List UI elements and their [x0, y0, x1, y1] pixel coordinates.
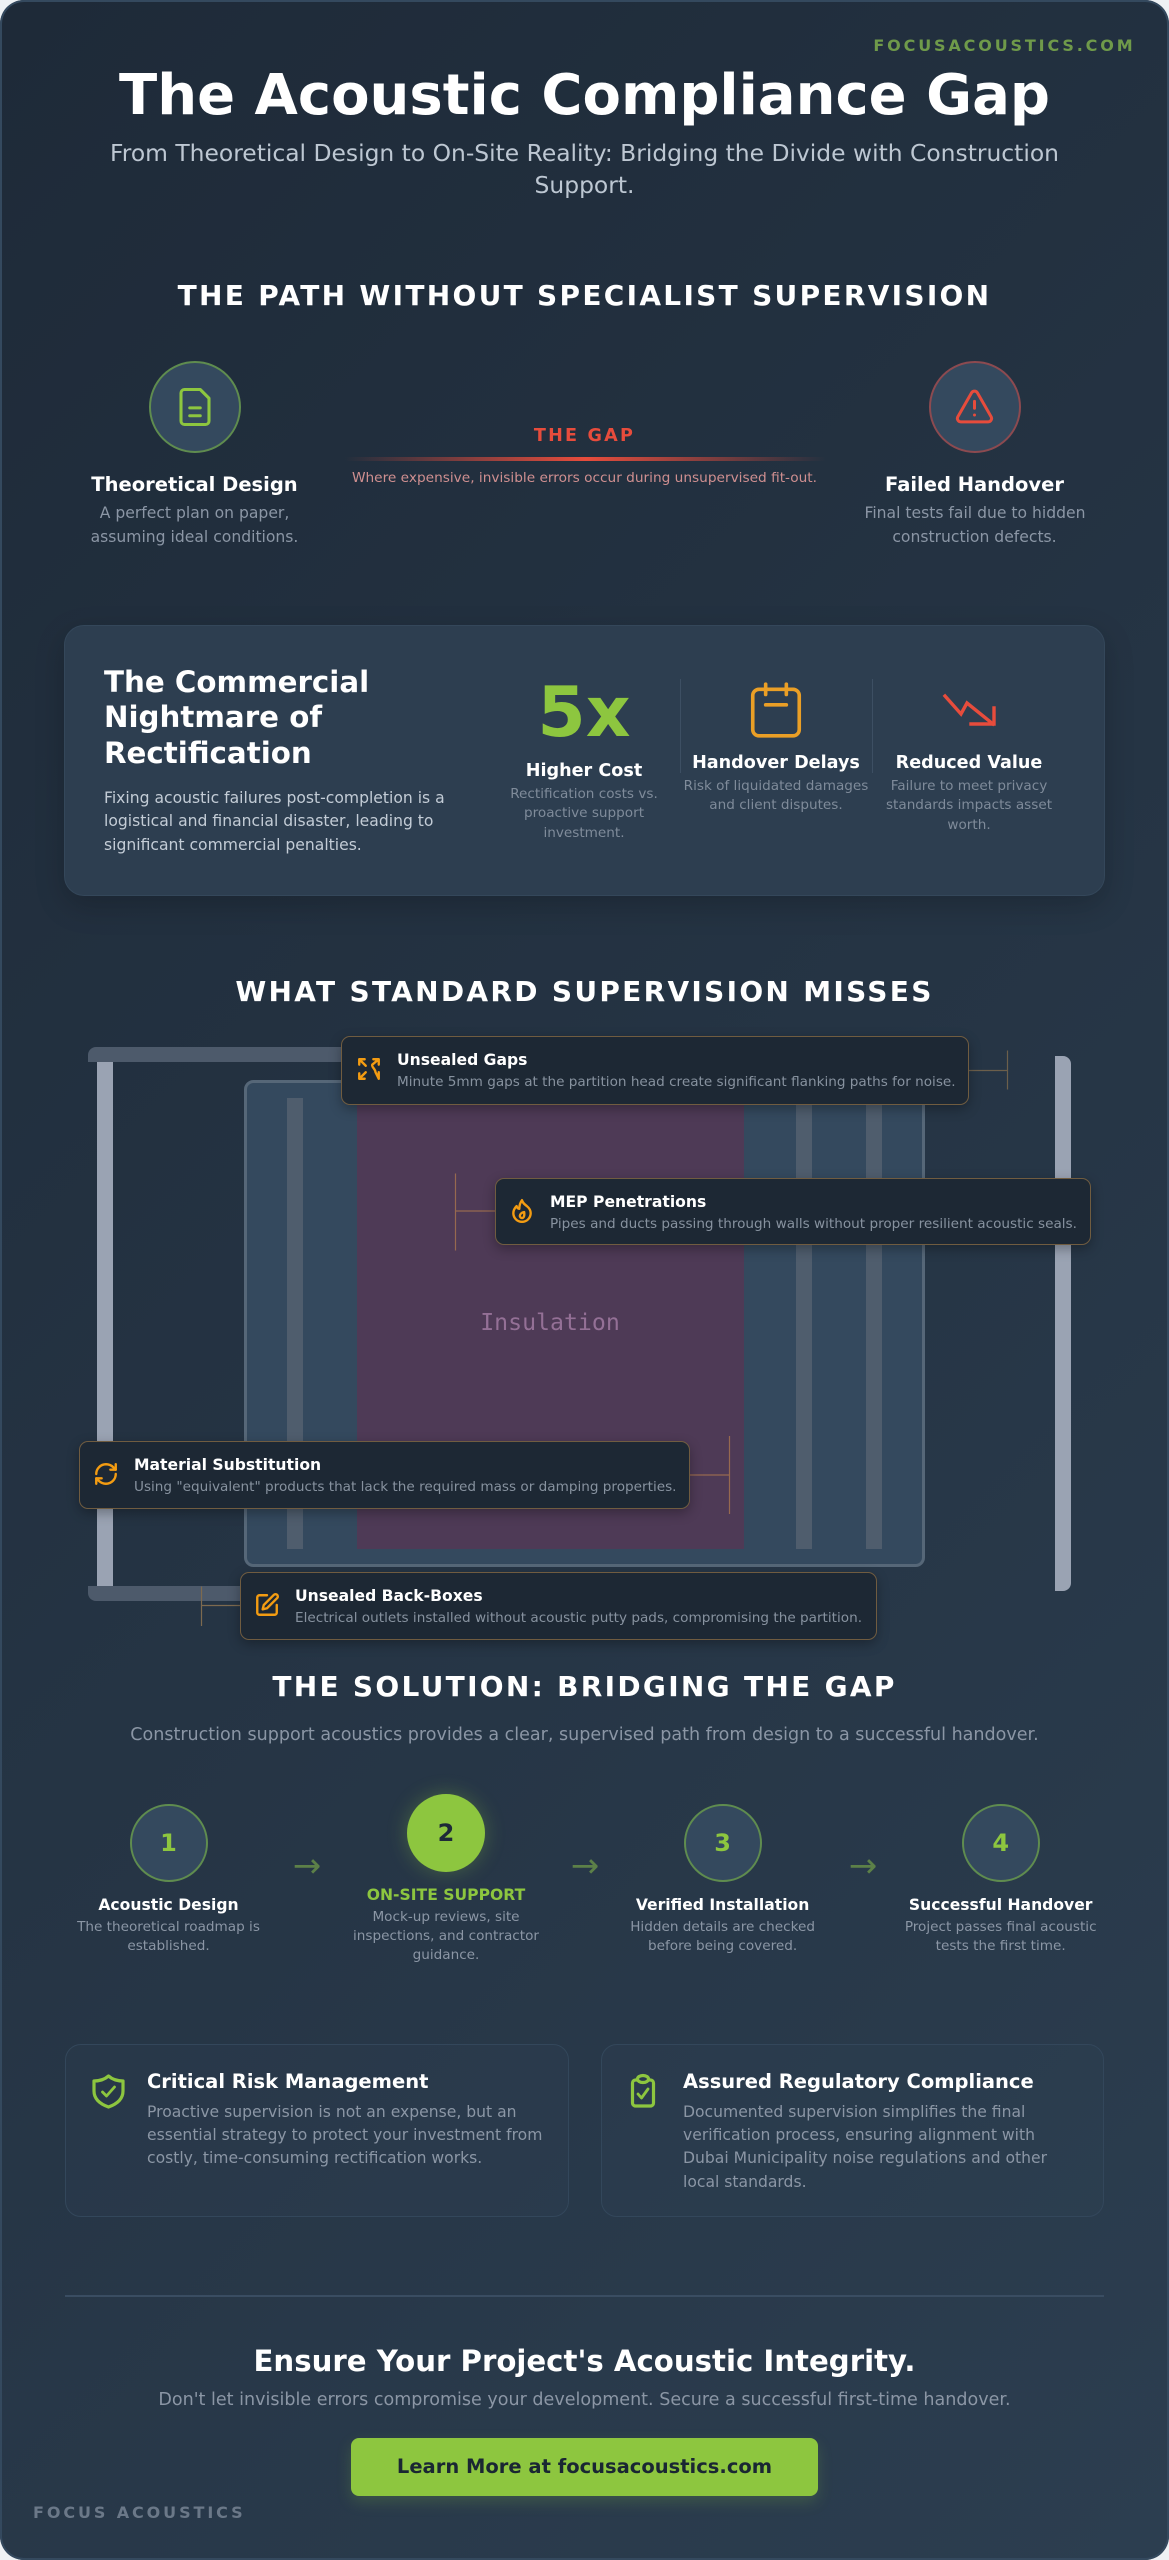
stud 3: [866, 1098, 882, 1549]
heading: path without supervision: THE PATH WITHOUT SPECIALIST SUPERVISION: [178, 278, 991, 312]
subtitle: From Theoretical Design to On-Site Reality: Bridging the Divide with Construction: [110, 139, 1059, 167]
callout title: Unsealed Gaps: [397, 1050, 527, 1068]
panel description: Fixing acoustic failures post-completion is a: [104, 788, 445, 806]
connector: back-boxes: [202, 1586, 240, 1626]
step description: guidance.: [413, 1947, 479, 1963]
node description: construction defects.: [892, 528, 1057, 546]
panel description: significant commercial penalties.: [104, 836, 362, 854]
card text: [147, 2102, 542, 2167]
icon: refresh: [95, 1463, 117, 1485]
diagram: wall section: [88, 1047, 1071, 1626]
callout: unsealed back-boxes: [240, 1572, 877, 1640]
footer brand: FOCUS ACOUSTICS: [33, 2503, 246, 2522]
step title: Acoustic Design: [98, 1896, 239, 1914]
left board: [97, 1062, 113, 1586]
stat title: Handover Delays: [692, 753, 860, 773]
connector: MEP: [456, 1174, 495, 1250]
cavity box: [246, 1082, 924, 1566]
card text: verification process, ensuring alignment with: [683, 2126, 1035, 2144]
node description: A perfect plan on paper,: [100, 504, 289, 522]
step 3: [630, 1804, 815, 1954]
stat: higher cost: [510, 672, 658, 840]
panel heading: Rectification: [104, 736, 312, 770]
big number: 5x: [537, 672, 631, 753]
stat description: Risk of liquidated damages: [684, 778, 868, 794]
step 4: [905, 1804, 1097, 1954]
stat: reduced value: [886, 694, 1052, 832]
card text: Documented supervision simplifies the final: [683, 2102, 1025, 2120]
solution intro: Construction support acoustics provides a clear, supervised path from design to a successful handover.: [130, 1724, 1039, 1744]
callout description: Pipes and ducts passing through walls without proper resilient acoustic seals.: [550, 1216, 1077, 1232]
step 2 highlighted: [353, 1787, 539, 1963]
panel description: logistical and financial disaster, leading to: [104, 812, 433, 830]
icon: warning: [928, 361, 1020, 453]
gap label: THE GAP: [534, 426, 635, 446]
step description: Project passes final acoustic: [905, 1918, 1097, 1934]
CTA button: Learn More at focusacoustics.com: [397, 2454, 772, 2478]
step number: [407, 1794, 485, 1872]
insulation label: Insulation: [480, 1309, 620, 1336]
CTA button: [351, 2438, 818, 2496]
step description: [630, 1918, 815, 1954]
callout description: Minute 5mm gaps at the partition head create significant flanking paths for noise.: [397, 1074, 956, 1090]
arrow 1: →: [293, 1846, 321, 1886]
top track: [88, 1047, 720, 1062]
step description: before being covered.: [648, 1938, 797, 1954]
icon: trending down: [942, 694, 996, 726]
callout: MEP penetrations: [495, 1178, 1091, 1245]
node description: Final tests fail due to hidden: [864, 504, 1086, 522]
bottom track: [88, 1586, 720, 1601]
step description: Mock-up reviews, site: [372, 1908, 520, 1924]
step description: The theoretical roadmap is: [77, 1918, 260, 1934]
stud 2: [796, 1098, 812, 1549]
step description: established.: [127, 1938, 210, 1954]
step number: [962, 1804, 1040, 1882]
stat description: [886, 778, 1052, 832]
step number: 3: [714, 1829, 731, 1857]
panel description: [104, 788, 445, 854]
arrow 2: →: [571, 1846, 599, 1886]
stat description: and client disputes.: [709, 797, 843, 813]
step description: [353, 1908, 539, 1963]
heading: the solution: THE SOLUTION: BRIDGING THE GAP: [272, 1670, 897, 1703]
callout: material substitution: [79, 1441, 690, 1508]
insulation: [357, 1098, 744, 1549]
CTA heading: Ensure Your Project's Acoustic Integrity.: [253, 2344, 916, 2378]
title: The Acoustic Compliance Gap: [119, 62, 1050, 128]
stat description: Rectification costs vs.: [510, 786, 658, 802]
step description: tests the first time.: [936, 1938, 1066, 1954]
stat description: worth.: [947, 816, 991, 832]
icon: flame: [512, 1198, 532, 1223]
card text: Dubai Municipality noise regulations and other: [683, 2149, 1047, 2167]
step title: ON-SITE SUPPORT: [367, 1886, 525, 1904]
node description: [91, 504, 298, 546]
panel heading: The Commercial: [104, 664, 369, 698]
connector: gaps: [969, 1050, 1008, 1090]
heading: what standard supervision misses: WHAT STANDARD SUPERVISION MISSES: [235, 974, 934, 1008]
card title: Assured Regulatory Compliance: [683, 2070, 1034, 2093]
card title: Critical Risk Management: [147, 2070, 428, 2093]
icon: clipboard: [630, 2074, 656, 2108]
callout title: MEP Penetrations: [550, 1192, 706, 1210]
node title: Theoretical Design: [91, 472, 298, 496]
card text: costly, time-consuming rectification works.: [147, 2149, 482, 2167]
card text: essential strategy to protect your investment from: [147, 2126, 542, 2144]
step title: Successful Handover: [909, 1896, 1092, 1914]
step description: inspections, and contractor: [353, 1928, 539, 1944]
callout title: Material Substitution: [134, 1456, 321, 1474]
subtitle: [110, 139, 1059, 198]
stat description: [684, 778, 868, 813]
arrow 3: →: [849, 1846, 877, 1886]
stud 1: [287, 1098, 303, 1549]
card: critical risk management: [65, 2044, 569, 2217]
stat description: Failure to meet privacy: [891, 778, 1047, 794]
callout description: Using "equivalent" products that lack the required mass or damping properties.: [134, 1478, 676, 1494]
stat title: Reduced Value: [896, 753, 1042, 773]
card: assured regulatory compliance: [601, 2044, 1104, 2217]
node description: [864, 504, 1086, 546]
step number: 1: [160, 1829, 177, 1857]
icon: gaps arrows: [358, 1058, 380, 1080]
right board: [1055, 1056, 1071, 1591]
node description: assuming ideal conditions.: [91, 528, 298, 546]
step number: [684, 1804, 762, 1882]
node: failed handover: [864, 361, 1086, 546]
card text: local standards.: [683, 2173, 807, 2191]
step number: 2: [438, 1819, 454, 1847]
callout description: Electrical outlets installed without acoustic putty pads, compromising the partition.: [295, 1610, 862, 1626]
node: theoretical design: [91, 361, 298, 546]
stat: handover delays: [684, 682, 868, 813]
icon: edit: [256, 1593, 279, 1616]
subtitle: Support.: [535, 170, 634, 198]
gap line: [345, 457, 826, 461]
callout: unsealed gaps: [341, 1036, 969, 1104]
card text: [683, 2102, 1047, 2191]
gap description: Where expensive, invisible errors occur during unsupervised fit-out.: [352, 470, 817, 486]
stat title: Higher Cost: [526, 760, 642, 780]
stat description: standards impacts asset: [886, 797, 1052, 813]
step description: [905, 1918, 1097, 1954]
stat description: investment.: [543, 824, 625, 840]
icon: calendar: [750, 682, 802, 738]
stat description: proactive support: [524, 805, 644, 821]
step description: Hidden details are checked: [630, 1918, 815, 1934]
connector: substitution: [690, 1436, 730, 1514]
step 1: [77, 1804, 260, 1954]
step description: [77, 1918, 260, 1954]
gap bridge: [352, 426, 817, 486]
icon: document: [148, 361, 240, 453]
stat description: [510, 786, 658, 840]
callout title: Unsealed Back-Boxes: [295, 1586, 483, 1604]
panel heading: Nightmare of: [104, 700, 322, 734]
step number: [130, 1804, 208, 1882]
panel heading: [104, 664, 369, 770]
node title: Failed Handover: [885, 472, 1064, 496]
panel: commercial nightmare: [64, 625, 1105, 896]
card text: Proactive supervision is not an expense, but an: [147, 2102, 517, 2120]
icon: shield: [92, 2074, 125, 2109]
website label: FOCUSACOUSTICS.COM: [873, 36, 1136, 55]
CTA text: Don't let invisible errors compromise your development. Secure a successful first-time handover.: [158, 2390, 1011, 2410]
step number: 4: [992, 1829, 1009, 1857]
step title: Verified Installation: [636, 1896, 809, 1914]
